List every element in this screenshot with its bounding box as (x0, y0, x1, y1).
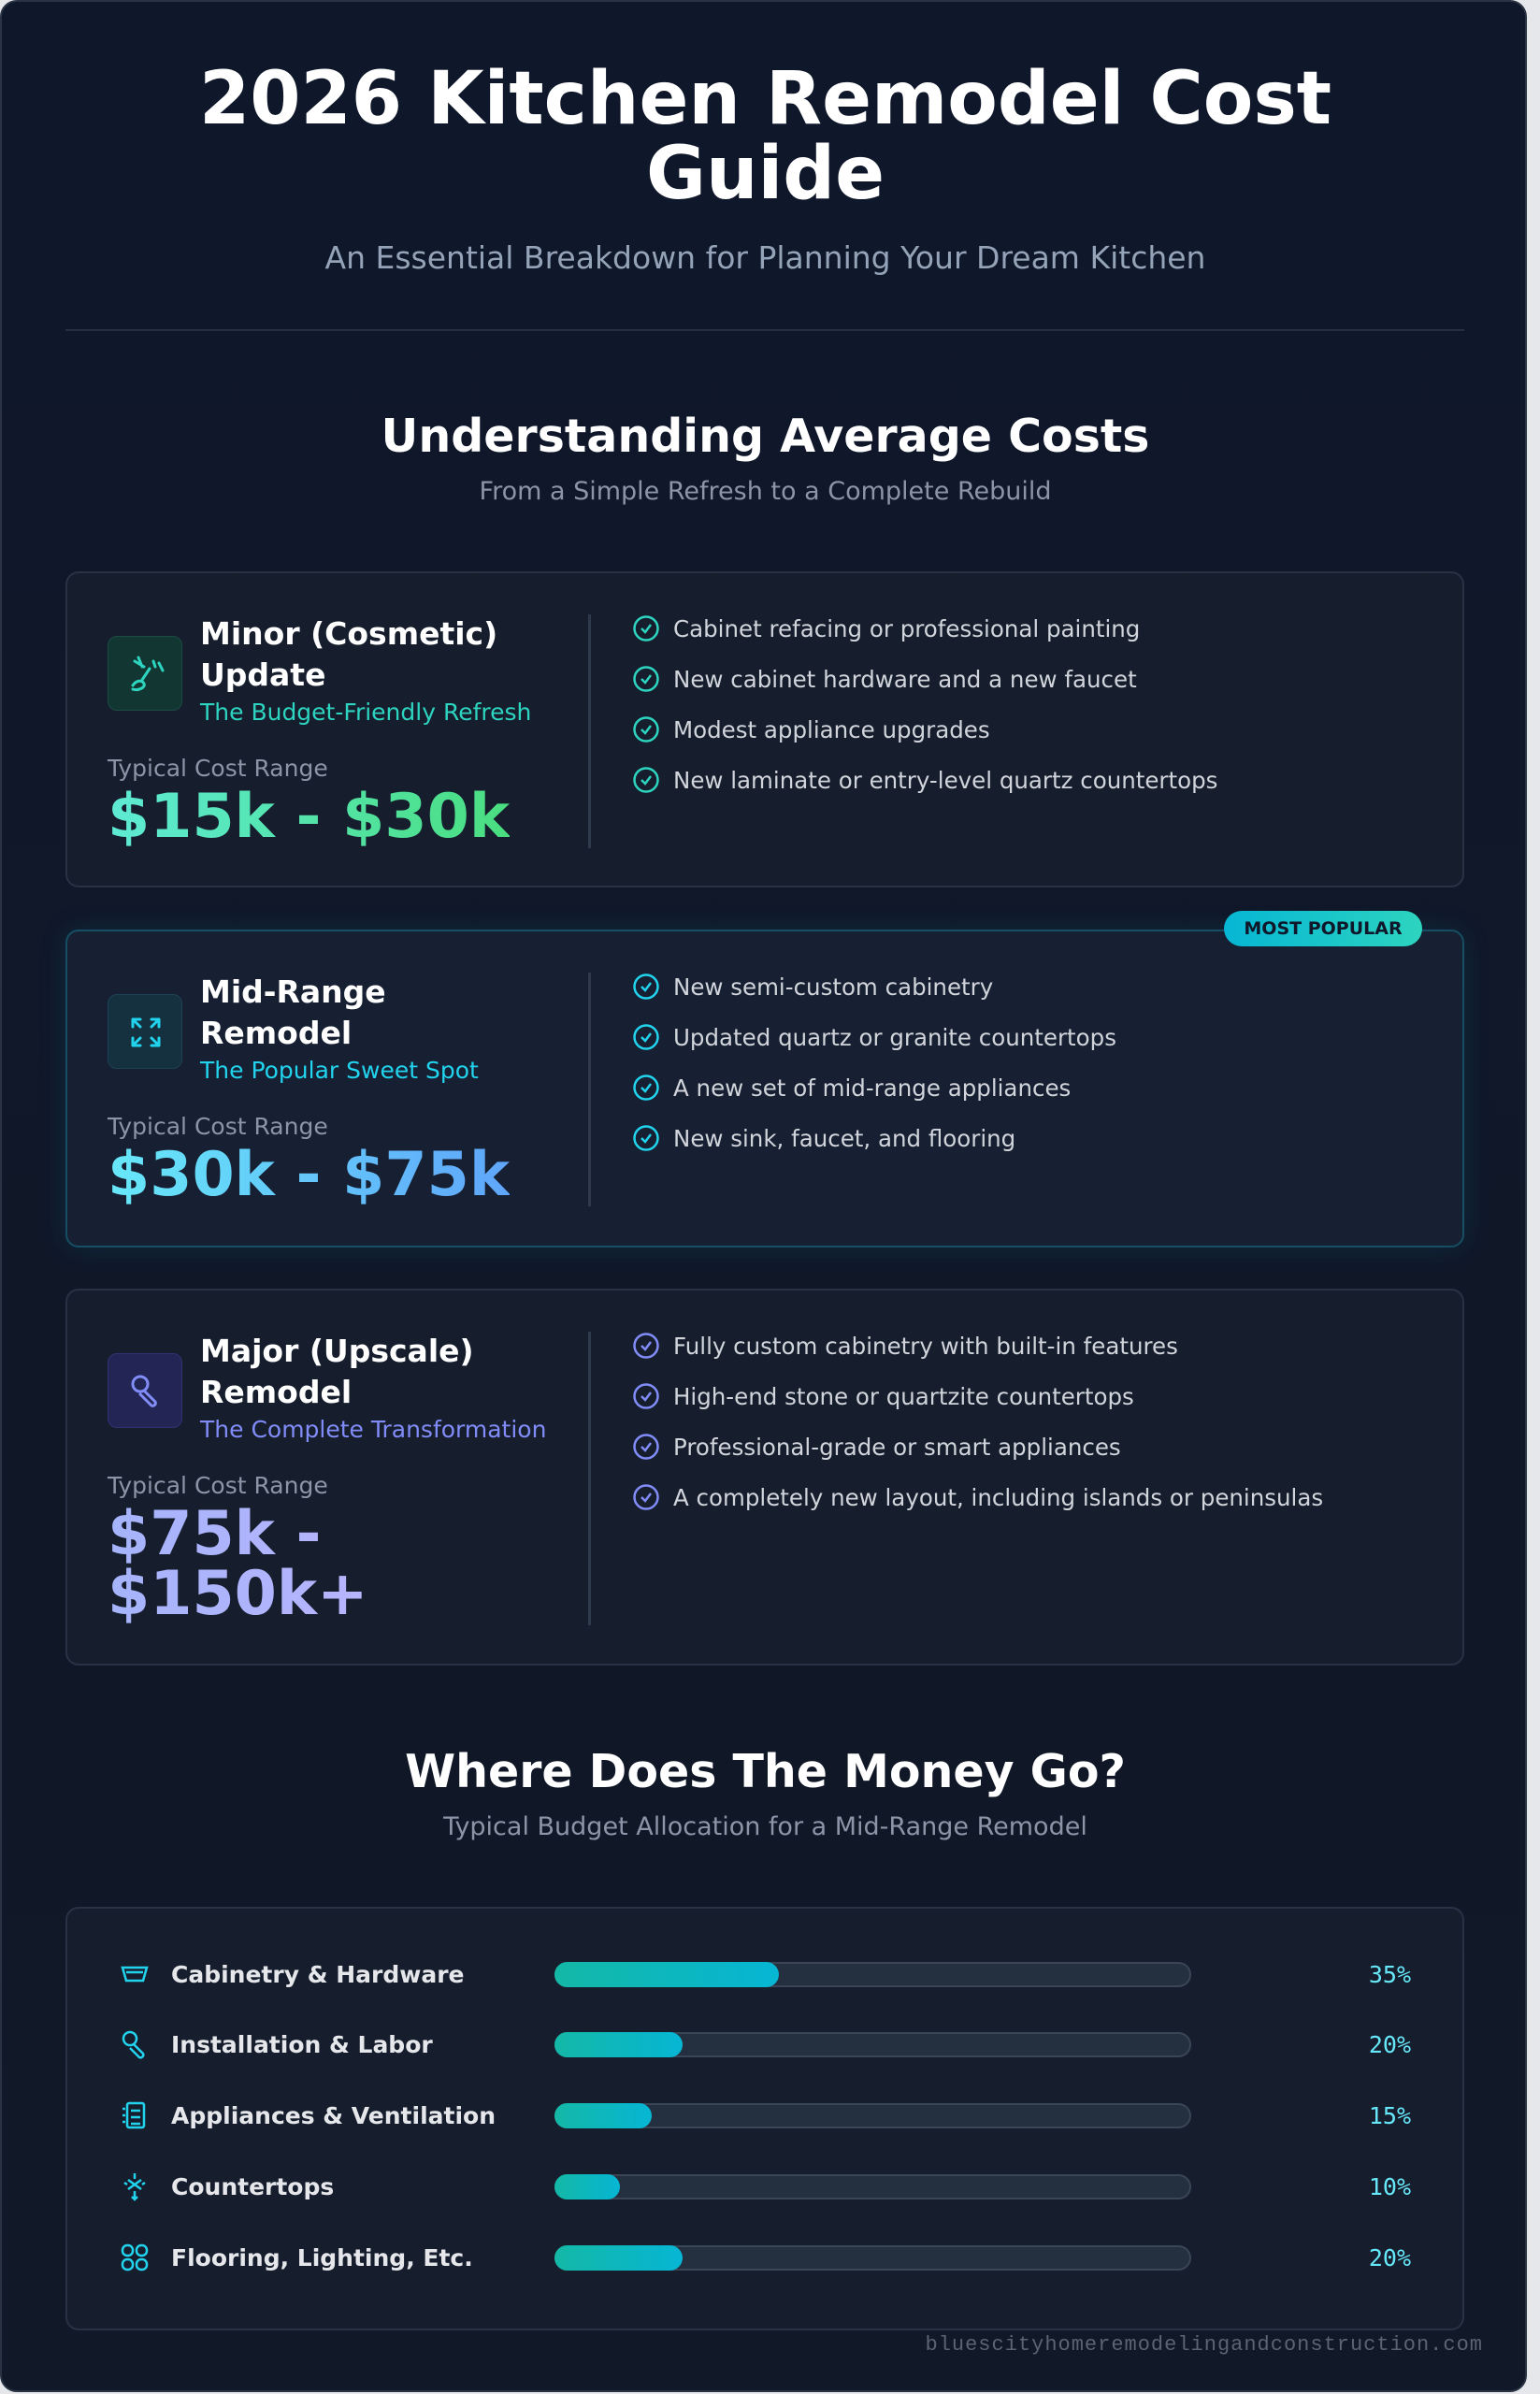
label: Typical Cost Range (108, 1472, 328, 1499)
tagline: The Budget-Friendly Refresh (200, 699, 531, 726)
row: installation: Installation & Labor (171, 2031, 433, 2057)
feature list (633, 973, 1116, 1152)
footer: website: bluescityhomeremodelingandconstruction.com (926, 2333, 1483, 2357)
card title: Major (Upscale) (200, 1333, 474, 1369)
feature list (633, 615, 1217, 793)
badge: most popular (1224, 911, 1422, 946)
row: flooring: 20% (1369, 2244, 1411, 2271)
card title: Remodel (200, 1374, 352, 1410)
row: appliances: 15% (1369, 2102, 1411, 2128)
icon: wrench (108, 1353, 182, 1428)
card: major remodel (65, 1289, 1464, 1666)
price: $150k+ (108, 1559, 368, 1629)
subheading: Typical Budget Allocation for a Mid-Range Remodel (443, 1812, 1087, 1841)
tagline: The Complete Transformation (200, 1416, 546, 1443)
card title: Minor (Cosmetic) (200, 615, 497, 652)
row: flooring: Flooring, Lighting, Etc. (171, 2244, 473, 2271)
row: cabinetry: Cabinetry & Hardware (171, 1960, 464, 1988)
card title (200, 615, 497, 693)
row: installation: 20% (1369, 2031, 1411, 2057)
row: countertops (123, 2173, 1411, 2201)
card title: Mid-Range (200, 973, 386, 1010)
price: $15k - $30k (108, 782, 510, 852)
feature list: New semi-custom cabinetry (673, 973, 993, 1001)
feature list: Fully custom cabinetry with built-in features (673, 1332, 1178, 1360)
badge: most popular: MOST POPULAR (1244, 918, 1403, 939)
heading: where does the money go: Where Does The Money Go? (405, 1745, 1126, 1798)
feature list: Updated quartz or granite countertops (673, 1023, 1116, 1051)
card title: Update (200, 656, 325, 693)
card title (200, 973, 386, 1051)
row: cabinetry (121, 1960, 1411, 1988)
title: 2026 Kitchen Remodel Cost (199, 57, 1331, 141)
feature list: High-end stone or quartzite countertops (673, 1382, 1134, 1410)
feature list: A completely new layout, including islands or peninsulas (673, 1483, 1323, 1511)
row: countertops: Countertops (171, 2173, 334, 2199)
panel: budget allocation bar chart (65, 1907, 1464, 2330)
price: $30k - $75k (108, 1140, 510, 1210)
feature list: New sink, faucet, and flooring (673, 1124, 1015, 1152)
row: appliances (122, 2102, 1411, 2128)
title (199, 57, 1331, 216)
subheading: From a Simple Refresh to a Complete Rebuild (479, 477, 1051, 506)
feature list: Professional-grade or smart appliances (673, 1433, 1121, 1461)
feature list: Modest appliance upgrades (673, 716, 990, 743)
label: Typical Cost Range (108, 1113, 328, 1140)
subtitle: An Essential Breakdown for Planning Your Dream Kitchen (325, 239, 1205, 276)
row: countertops: 10% (1369, 2173, 1411, 2199)
label: Typical Cost Range (108, 755, 328, 782)
card title: Remodel (200, 1015, 352, 1051)
feature list: New cabinet hardware and a new faucet (673, 666, 1137, 692)
price: $75k - (108, 1499, 322, 1569)
feature list: Cabinet refacing or professional painting (673, 615, 1140, 642)
card: mid-range remodel (65, 930, 1464, 1247)
feature list (633, 1332, 1323, 1511)
card: minor update (65, 571, 1464, 887)
card title (200, 1333, 474, 1410)
title: Guide (646, 132, 885, 216)
row: flooring (122, 2244, 1411, 2271)
icon: brush (108, 636, 182, 711)
icon: expand (108, 994, 182, 1069)
feature list: A new set of mid-range appliances (673, 1074, 1071, 1102)
row: cabinetry: 35% (1369, 1960, 1411, 1988)
heading: understanding average costs: Understanding Average Costs (381, 410, 1149, 463)
row: installation (122, 2031, 1411, 2059)
price (108, 1505, 556, 1624)
tagline: The Popular Sweet Spot (200, 1057, 479, 1084)
row: appliances: Appliances & Ventilation (171, 2102, 496, 2128)
feature list: New laminate or entry-level quartz countertops (673, 767, 1217, 793)
